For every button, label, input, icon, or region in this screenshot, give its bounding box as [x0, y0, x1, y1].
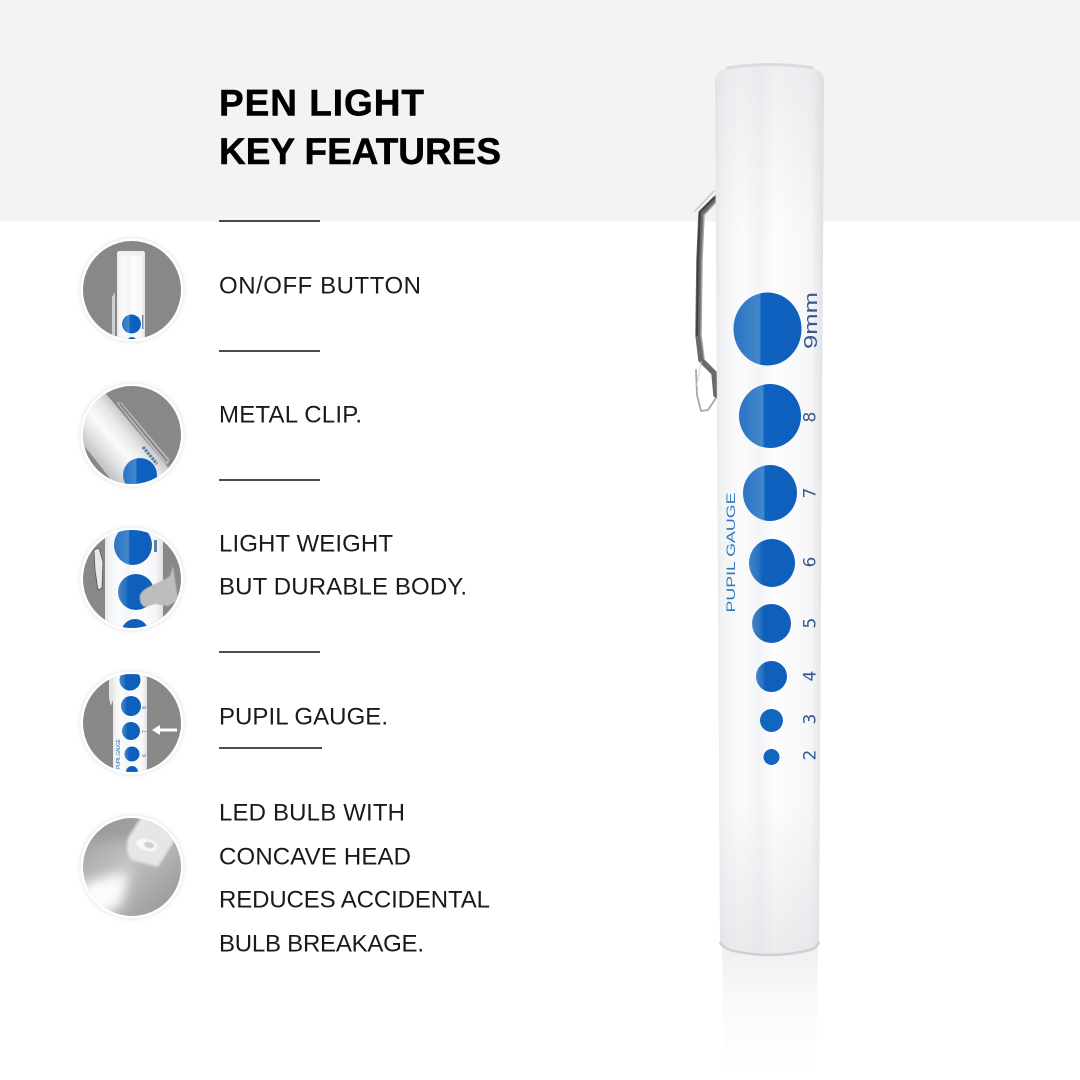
icon: pupil gauge closeup: PUPIL GAUGE — [116, 738, 122, 769]
title: KEY FEATURES — [219, 131, 501, 172]
pupil gauge label: PUPIL GAUGE — [724, 493, 738, 612]
gauge labels: 4 — [800, 671, 820, 682]
gauge labels: 6 — [800, 557, 820, 568]
icon: pupil gauge closeup — [80, 670, 184, 780]
title: PEN LIGHT — [219, 82, 424, 124]
feature text: light weight body: LIGHT WEIGHT — [219, 530, 393, 558]
metal clip — [695, 191, 716, 411]
gauge labels: 3 — [800, 714, 820, 724]
gauge labels: 8 — [800, 412, 820, 422]
icon: led bulb closeup — [80, 810, 184, 925]
feature text: led bulb: CONCAVE HEAD — [219, 844, 411, 870]
feature text: led bulb: LED BULB WITH — [219, 800, 405, 826]
gauge labels: 9mm — [801, 292, 821, 349]
icon: white arrow — [152, 725, 177, 735]
feature text: led bulb: REDUCES ACCIDENTAL — [219, 886, 490, 914]
feature text: metal clip: METAL CLIP. — [219, 402, 362, 428]
gauge labels: 7 — [800, 488, 820, 498]
icon: pupil gauge closeup: 8 — [142, 706, 148, 709]
feature text: light weight body: BUT DURABLE BODY. — [219, 574, 467, 600]
pen top shading — [715, 64, 824, 240]
feature text: on/off button: ON/OFF BUTTON — [219, 272, 421, 300]
icon: durable body closeup — [79, 526, 185, 632]
gauge labels: 5 — [800, 618, 820, 628]
title — [219, 82, 501, 172]
feature text: light weight body — [219, 530, 467, 600]
top grey header band — [0, 0, 1080, 222]
icon: pupil gauge closeup: 6 — [142, 754, 148, 757]
feature text: led bulb: BULB BREAKAGE. — [219, 930, 424, 958]
pupil gauge dots — [734, 292, 802, 765]
pen light product — [695, 64, 824, 955]
gauge labels — [800, 292, 821, 760]
feature list — [219, 221, 490, 958]
pen body — [715, 64, 824, 955]
icon: pupil gauge closeup: 7 — [142, 730, 148, 733]
gauge labels: 2 — [800, 750, 820, 760]
pen reflection — [722, 948, 818, 1075]
pen bottom shading — [719, 800, 820, 955]
feature text: pupil gauge: PUPIL GAUGE. — [219, 704, 388, 730]
icon: metal clip closeup — [79, 382, 185, 488]
feature text: led bulb — [219, 800, 490, 958]
icon: on/off button closeup — [80, 238, 184, 350]
